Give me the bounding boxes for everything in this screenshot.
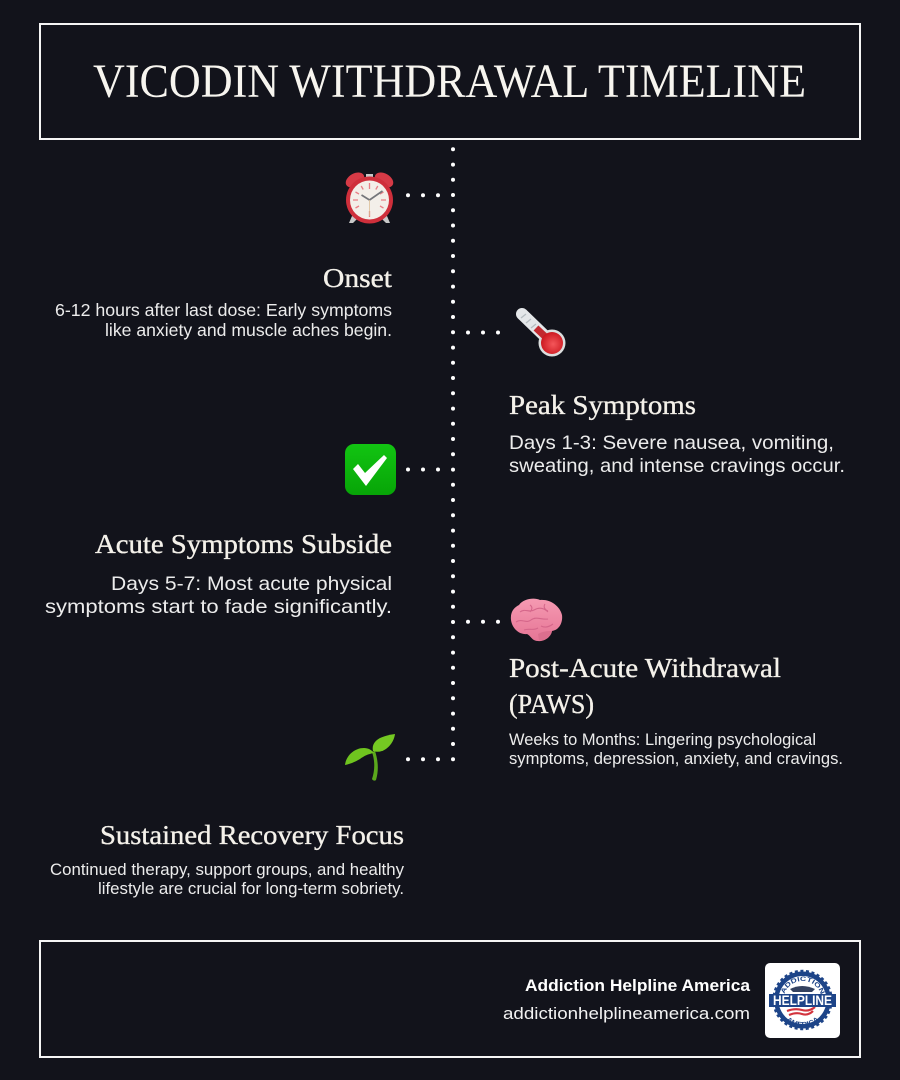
- heading and text: post-acute withdrawal: (PAWS): [509, 689, 594, 719]
- icon: brain: [511, 599, 562, 641]
- heading and text: post-acute withdrawal: symptoms, depression, anxiety, and cravings.: [509, 750, 843, 768]
- connector: acute symptoms subside: [406, 468, 440, 472]
- heading and text: sustained recovery focus: [50, 820, 405, 898]
- heading and text: peak symptoms: [509, 390, 845, 477]
- heading and text: onset: Onset: [323, 263, 393, 293]
- title banner: [40, 24, 860, 139]
- footer panel: [39, 940, 861, 1058]
- heading and text: sustained recovery focus: Sustained Recovery Focus: [100, 820, 404, 850]
- heading and text: onset: [55, 263, 393, 340]
- heading and text: onset: 6-12 hours after last dose: Early symptoms: [55, 300, 392, 320]
- heading and text: post-acute withdrawal: Post-Acute Withdrawal: [509, 653, 781, 683]
- icon: thermometer: [521, 314, 566, 356]
- heading and text: acute symptoms subside: Days 5-7: Most acute physical: [111, 573, 392, 595]
- icon: alarm clock: [343, 169, 396, 224]
- footer website: addictionhelplineamerica.com: [503, 1005, 750, 1023]
- heading and text: peak symptoms: Days 1-3: Severe nausea, vomiting,: [509, 432, 834, 454]
- title: VICODIN WITHDRAWAL TIMELINE: [93, 55, 806, 108]
- logo badge: ADDICTION: [781, 976, 825, 994]
- logo badge: HELPLINE: [773, 993, 832, 1008]
- connector: post-acute withdrawal: [466, 620, 500, 624]
- connector: sustained recovery: [406, 757, 440, 761]
- logo badge: AMERICA: [788, 1018, 817, 1024]
- icon: check mark: [345, 444, 396, 495]
- dotted timeline spine: [451, 147, 455, 761]
- connector: peak symptoms: [466, 330, 500, 334]
- heading and text: acute symptoms subside: Acute Symptoms Subside: [95, 529, 392, 559]
- heading and text: onset: like anxiety and muscle aches begin.: [105, 320, 392, 340]
- icon: seedling: [345, 734, 395, 781]
- heading and text: acute symptoms subside: symptoms start to fade significantly.: [45, 596, 392, 618]
- heading and text: post-acute withdrawal: Weeks to Months: Lingering psychological: [509, 731, 816, 749]
- heading and text: peak symptoms: sweating, and intense cravings occur.: [509, 455, 845, 477]
- heading and text: peak symptoms: Peak Symptoms: [509, 390, 696, 420]
- heading and text: sustained recovery focus: lifestyle are crucial for long-term sobriety.: [98, 880, 404, 898]
- connector: onset: [406, 193, 440, 197]
- logo badge: [765, 963, 840, 1038]
- footer organisation name: Addiction Helpline America: [525, 977, 751, 995]
- heading and text: acute symptoms subside: [45, 529, 392, 618]
- heading and text: sustained recovery focus: Continued therapy, support groups, and healthy: [50, 861, 405, 879]
- heading and text: post-acute withdrawal: [509, 653, 843, 768]
